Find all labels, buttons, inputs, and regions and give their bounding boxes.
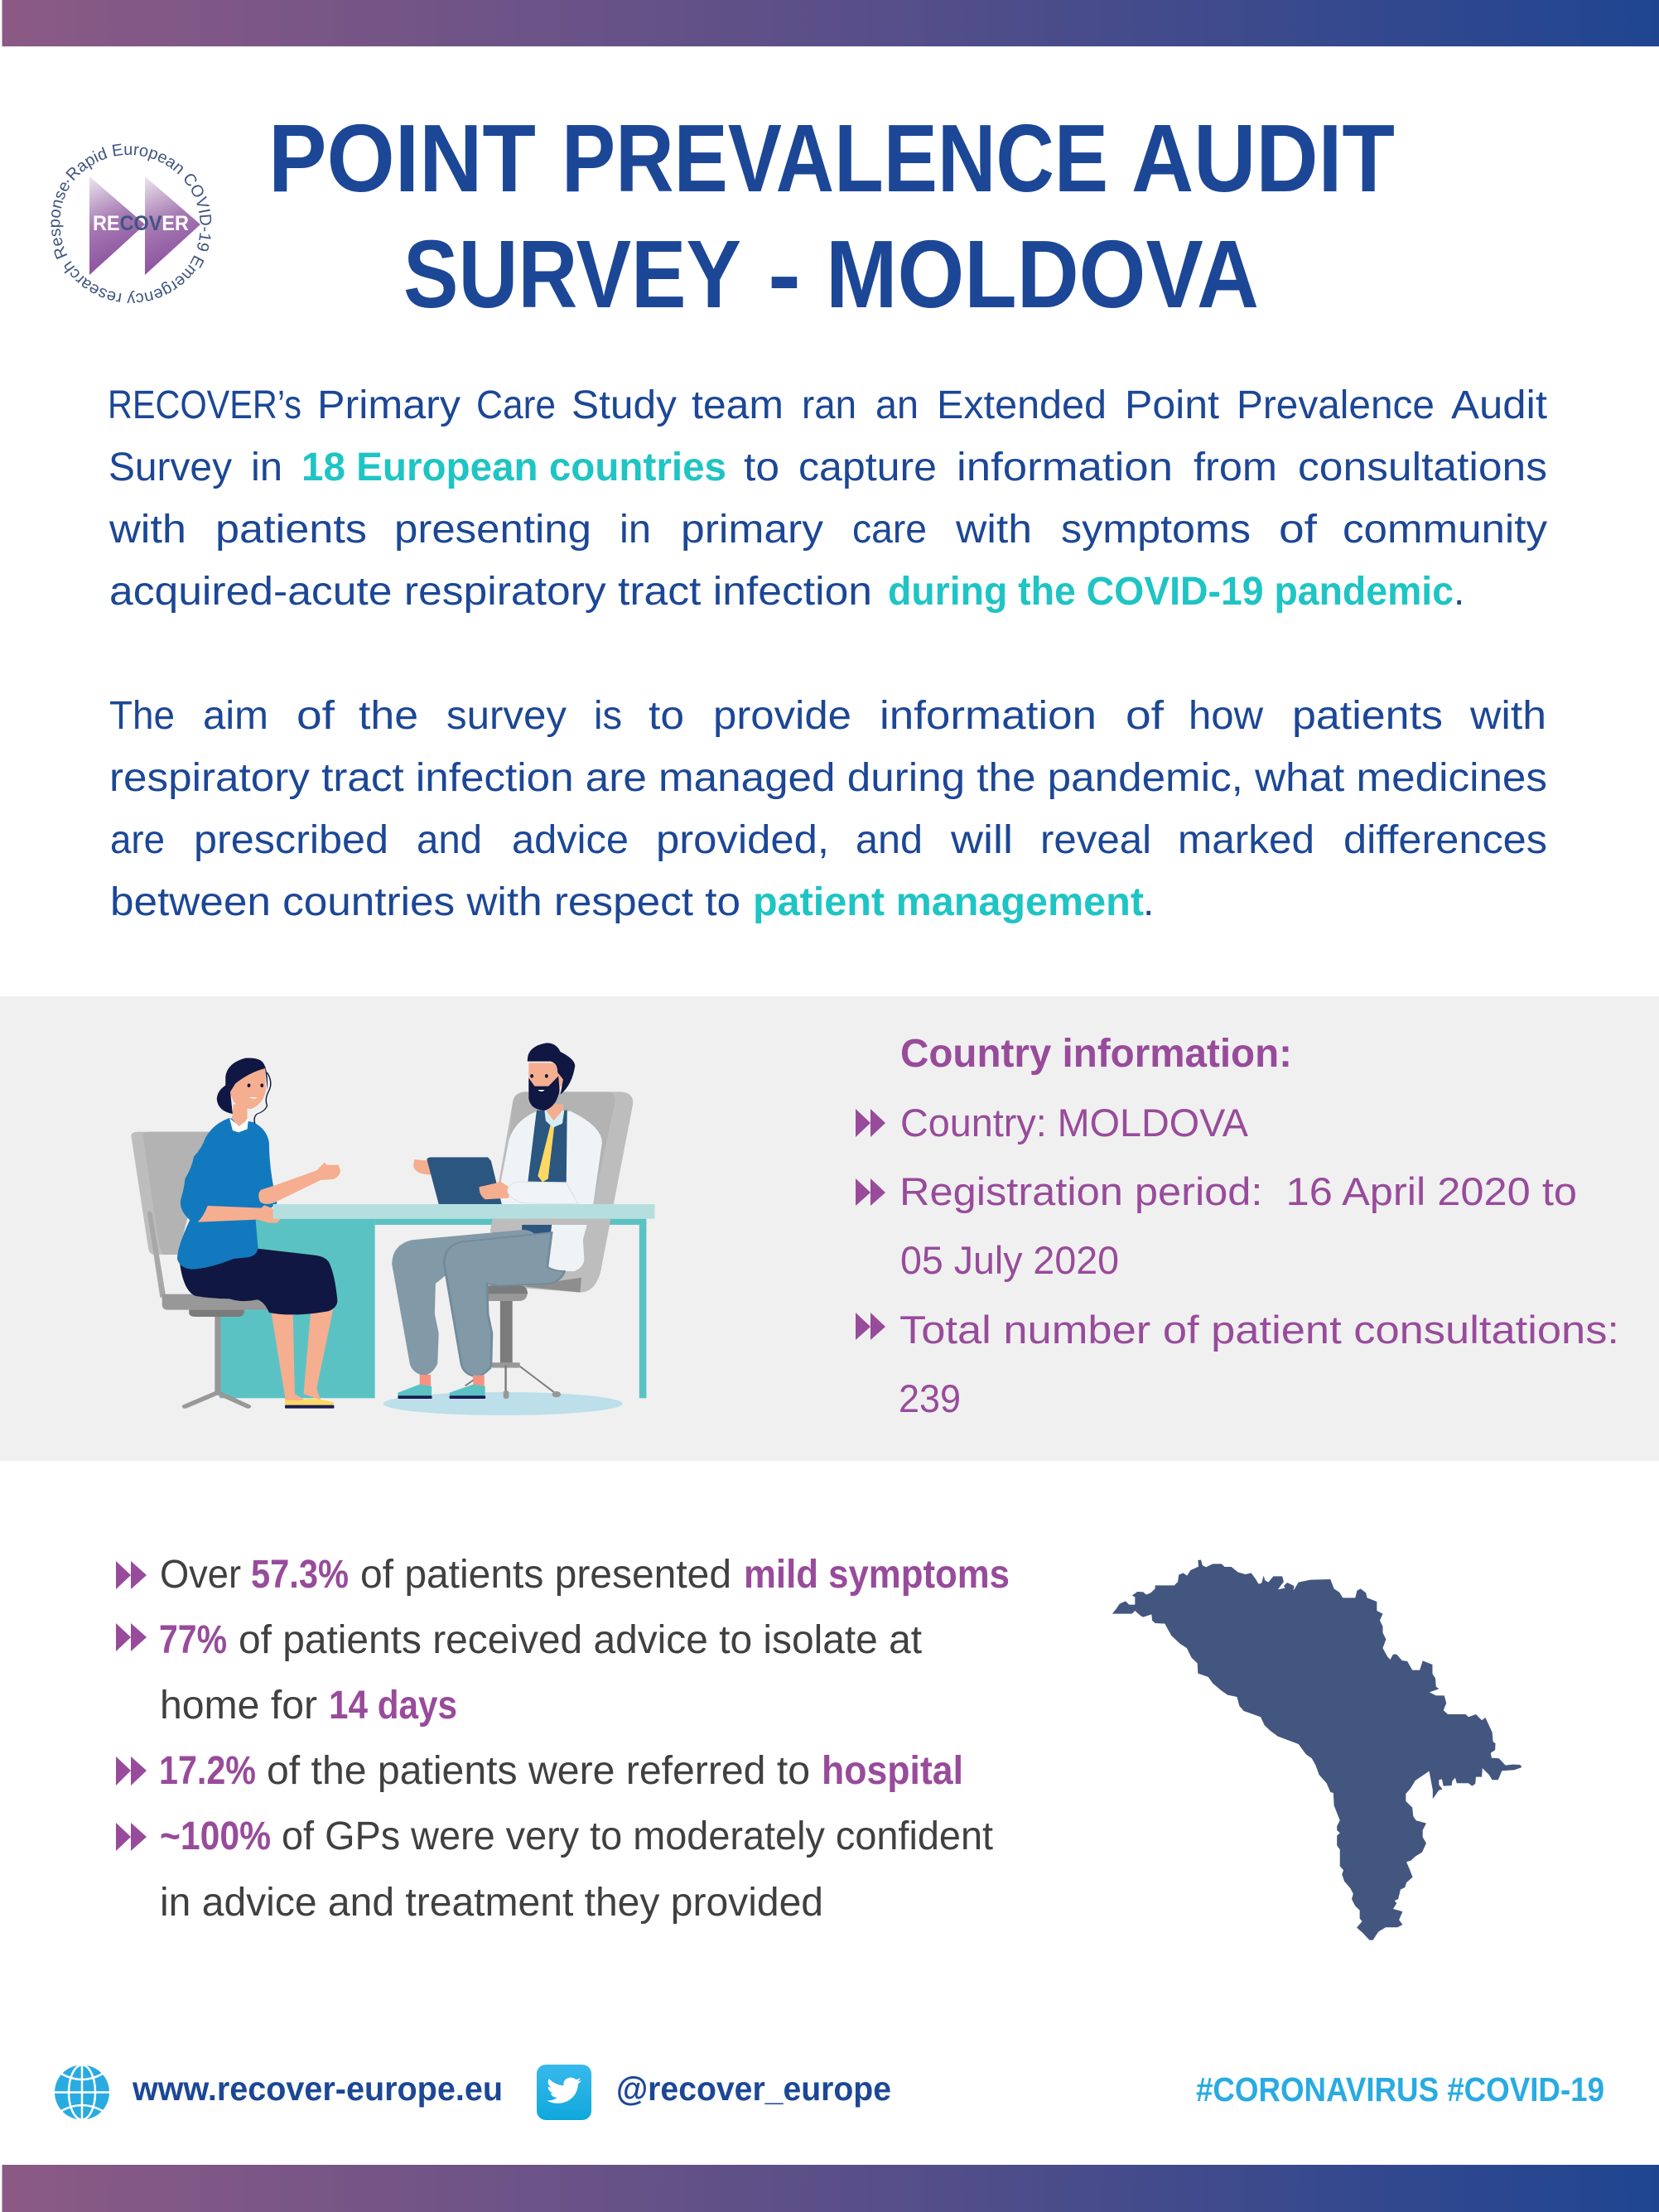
doctor coat: [495, 1111, 602, 1204]
logo: RECOVER: [51, 144, 212, 303]
aim paragraph: provided,: [656, 818, 829, 862]
top gradient bar: [2, 0, 1659, 46]
intro paragraph: consultations: [1298, 446, 1547, 489]
aim paragraph: .: [1143, 880, 1154, 924]
key findings list: of GPs were very to moderately confident: [282, 1814, 993, 1858]
country information text: [856, 1032, 1619, 1420]
title: -: [768, 220, 801, 328]
aim paragraph: patients: [1292, 694, 1443, 738]
aim paragraph: to: [649, 694, 684, 738]
aim paragraph: how: [1189, 694, 1263, 738]
twitter handle: @recover_europe: [616, 2070, 891, 2108]
bullet arrows: [116, 1561, 147, 1851]
aim paragraph: patient management: [753, 880, 1144, 924]
aim paragraph: reveal: [1040, 818, 1151, 862]
icon: globe: [55, 2065, 109, 2120]
intro paragraph: [108, 383, 1547, 614]
key findings list: home for: [160, 1684, 317, 1728]
aim paragraph: differences: [1343, 818, 1547, 862]
key findings list: of the patients were referred to: [267, 1749, 810, 1793]
key findings list: hospital: [822, 1749, 963, 1793]
tabletop: [273, 1204, 654, 1219]
aim paragraph: prescribed: [194, 818, 388, 862]
tablet and hands: [413, 1157, 578, 1204]
woman arms: [198, 1162, 340, 1223]
intro paragraph: primary: [681, 508, 823, 552]
key findings list: in advice and treatment they provided: [160, 1881, 823, 1925]
icon: twitter: [537, 2065, 591, 2120]
intro paragraph: Primary: [317, 383, 461, 427]
woman chair: [131, 1132, 269, 1406]
intro paragraph: Audit: [1451, 383, 1547, 427]
title: PREVALENCE: [562, 104, 1108, 212]
intro paragraph: during the COVID-19 pandemic: [888, 570, 1454, 614]
doctor head: [528, 1043, 575, 1120]
illustration: patient and doctor at a desk: [131, 1043, 654, 1415]
aim paragraph: [109, 694, 1547, 924]
intro paragraph: RECOVER’s: [108, 383, 301, 427]
aim paragraph: aim: [203, 694, 268, 738]
key findings list: of patients presented: [360, 1553, 731, 1597]
desk: [219, 1219, 646, 1398]
intro paragraph: in: [620, 508, 651, 552]
intro paragraph: Point: [1125, 383, 1219, 427]
aim paragraph: is: [594, 694, 622, 738]
logo arrow triangles: [89, 176, 200, 275]
title: SURVEY: [403, 220, 741, 328]
country information text: 05 July 2020: [900, 1238, 1119, 1282]
aim paragraph: provide: [713, 694, 851, 738]
aim paragraph: between countries with respect to: [110, 880, 740, 924]
floor shadow: [383, 1392, 623, 1415]
intro paragraph: Prevalence: [1237, 383, 1435, 427]
intro paragraph: with: [109, 508, 186, 552]
title: MOLDOVA: [826, 220, 1259, 328]
doctor shoes: [398, 1375, 485, 1399]
title: AUDIT: [1131, 104, 1395, 212]
key findings list: mild symptoms: [744, 1553, 1010, 1597]
intro paragraph: .: [1454, 570, 1464, 614]
aim paragraph: of: [1126, 694, 1165, 738]
intro paragraph: team: [692, 383, 784, 427]
key findings list: 17.2%: [159, 1749, 256, 1793]
title: [268, 104, 1395, 328]
intro paragraph: capture: [798, 446, 937, 489]
bottom gradient bar: [2, 2165, 1659, 2212]
aim paragraph: The: [109, 694, 175, 738]
country information text: Country: MOLDOVA: [900, 1101, 1249, 1145]
key findings list: 14 days: [329, 1684, 457, 1728]
intro paragraph: presenting: [394, 508, 591, 552]
key findings list: of patients received advice to isolate at: [239, 1618, 922, 1662]
intro paragraph: of: [1279, 508, 1318, 552]
intro paragraph: with: [955, 508, 1032, 552]
panel: country information band: [0, 996, 1659, 1461]
intro paragraph: Extended: [937, 383, 1107, 427]
aim paragraph: the: [359, 694, 418, 738]
intro paragraph: community: [1343, 508, 1547, 552]
doctor lower coat: [522, 1225, 587, 1271]
intro paragraph: from: [1194, 446, 1277, 489]
aim paragraph: survey: [446, 694, 567, 738]
key findings list: 57.3%: [251, 1553, 349, 1597]
intro paragraph: care: [852, 508, 927, 552]
intro paragraph: Care: [476, 383, 556, 427]
aim paragraph: will: [950, 818, 1013, 862]
intro paragraph: 18 European countries: [301, 446, 726, 489]
key findings list: Over: [160, 1553, 241, 1597]
title: POINT: [268, 104, 536, 212]
woman head: [217, 1058, 271, 1132]
key findings list: [116, 1553, 1010, 1925]
aim paragraph: of: [297, 694, 335, 738]
bullet arrows: [856, 1109, 885, 1340]
intro paragraph: patients: [215, 508, 367, 552]
intro paragraph: symptoms: [1061, 508, 1251, 552]
aim paragraph: respiratory tract infection are managed during the pandemic, what medicines: [109, 756, 1547, 800]
woman skirt: [180, 1249, 337, 1314]
intro paragraph: information: [957, 446, 1173, 489]
intro paragraph: an: [875, 383, 919, 427]
aim paragraph: with: [1469, 694, 1546, 738]
intro paragraph: in: [251, 446, 282, 489]
aim paragraph: advice: [512, 818, 629, 862]
website: www.recover-europe.eu: [132, 2070, 503, 2108]
woman legs and shoes: [271, 1308, 334, 1409]
intro paragraph: Study: [571, 383, 677, 427]
map of Moldova: [1112, 1559, 1522, 1940]
aim paragraph: marked: [1178, 818, 1314, 862]
aim paragraph: and: [417, 818, 482, 862]
logo circular text: ·Rapid European COVID-19 Emergency research Response: [51, 144, 212, 303]
country information text: Country information:: [900, 1032, 1292, 1076]
key findings list: ~100%: [160, 1814, 271, 1858]
aim paragraph: are: [110, 818, 165, 862]
doctor trousers: [392, 1230, 564, 1376]
woman sweater: [177, 1118, 277, 1270]
hashtags: #CORONAVIRUS #COVID-19: [1196, 2070, 1604, 2108]
aim paragraph: and: [856, 818, 923, 862]
doctor vest and tie: [528, 1111, 567, 1182]
intro paragraph: Survey: [109, 446, 232, 489]
country information text: 239: [899, 1376, 961, 1420]
intro paragraph: to: [744, 446, 779, 489]
doctor chair: [465, 1092, 633, 1399]
intro paragraph: acquired-acute respiratory tract infection: [109, 570, 872, 614]
logo wordmark: RECOVER: [93, 212, 189, 235]
footer links: [55, 2065, 1604, 2120]
country information text: Total number of patient consultations:: [899, 1308, 1619, 1352]
intro paragraph: ran: [802, 383, 856, 427]
country information text: Registration period: 16 April 2020 to: [899, 1169, 1577, 1213]
aim paragraph: information: [880, 694, 1097, 738]
key findings list: 77%: [159, 1618, 227, 1662]
